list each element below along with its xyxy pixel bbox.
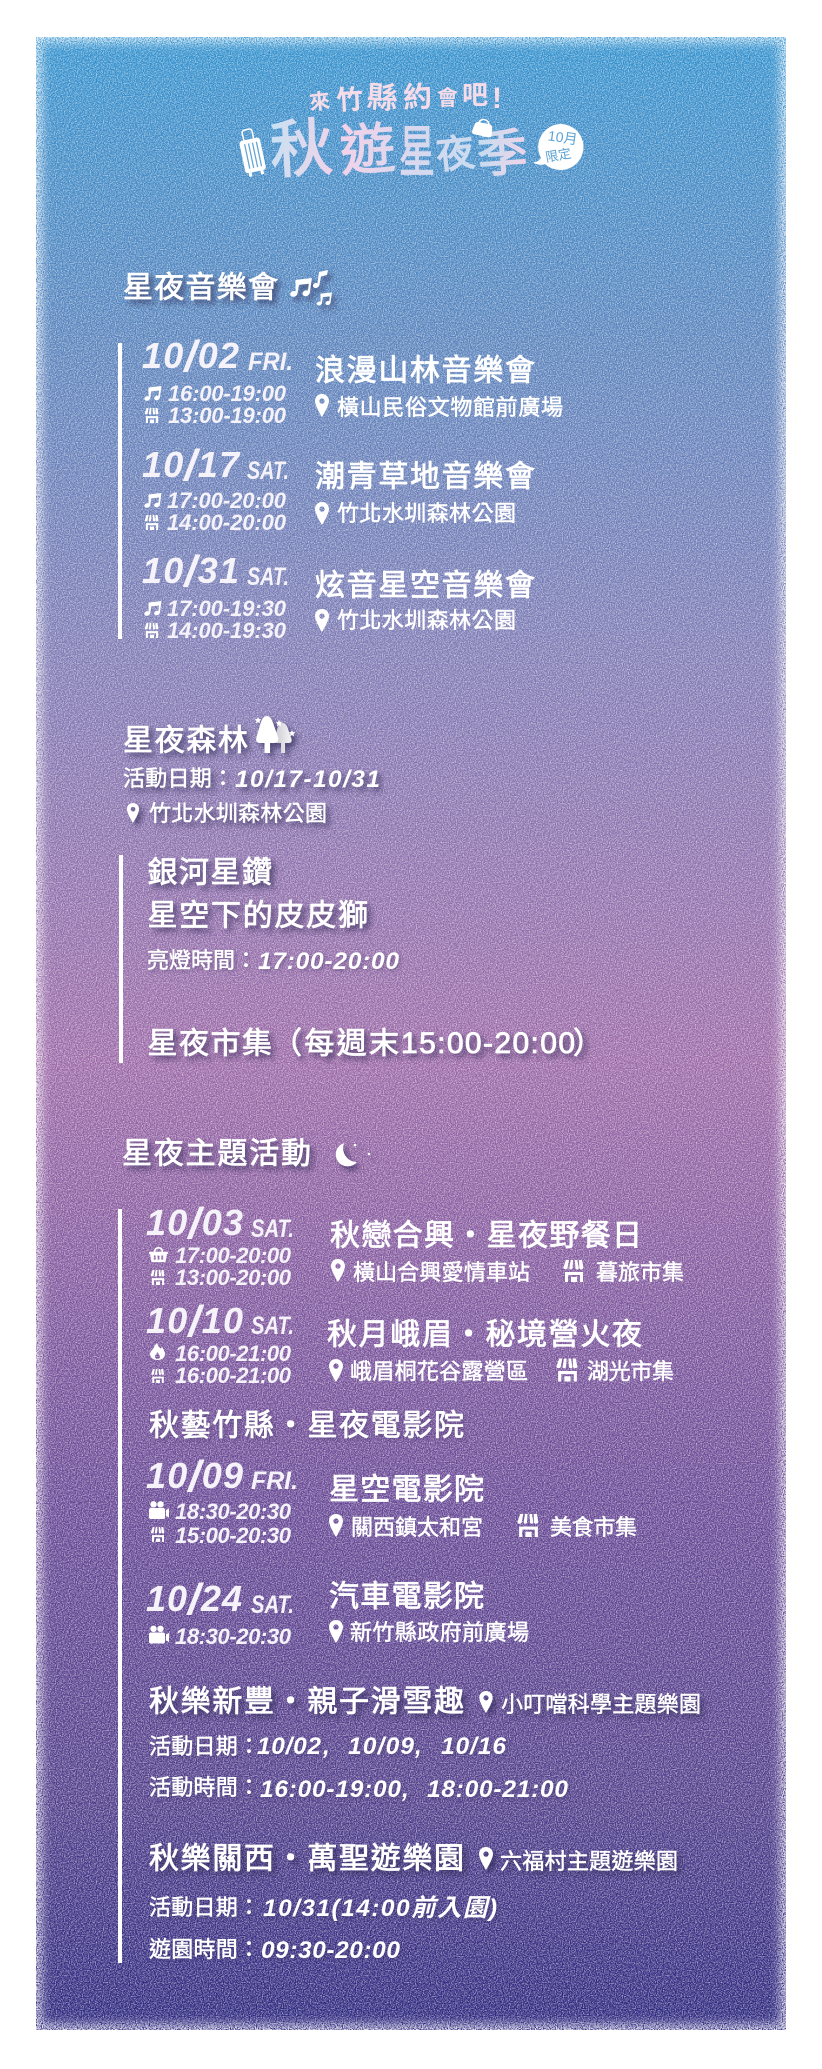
heading and location: 秋樂關西: 六福村主題遊樂園 xyxy=(500,1849,678,1874)
event: 10/03 秋戀合興: 13:00-20:00 xyxy=(175,1265,292,1290)
event: 10/31 炫音星空音樂會: 31 xyxy=(198,550,239,591)
event: 10/02 浪漫山林音樂會: / xyxy=(182,332,201,381)
logo main title: 遊 xyxy=(338,117,397,183)
event: 10/24 汽車電影院: / xyxy=(186,1575,205,1624)
event: 10/24 汽車電影院: 汽車電影院 xyxy=(329,1580,484,1614)
date: 活動日期: 活動日期： xyxy=(123,766,234,791)
dates and times: 秋樂關西: 10/31(14:00前入園) xyxy=(263,1895,497,1922)
event: 10/03 秋戀合興: / xyxy=(186,1199,205,1248)
event: 10/09 星空電影院: FRI. xyxy=(251,1467,298,1495)
logo main title: 秋 xyxy=(268,113,335,187)
event: 10/09 星空電影院: 15:00-20:30 xyxy=(175,1523,292,1548)
event: 10/17 潮青草地音樂會: 17:00-20:00 xyxy=(167,488,287,513)
event: 10/10 秋月峨眉: 10 xyxy=(146,1300,187,1341)
event: 10/10 秋月峨眉: 10 xyxy=(202,1300,243,1341)
dates and times: 秋樂關西: 09:30-20:00 xyxy=(261,1937,400,1964)
event: 10/09 星空電影院 xyxy=(146,1452,637,1548)
event: 10/10 秋月峨眉: 峨眉桐花谷露營區 xyxy=(350,1359,528,1384)
section: 星夜音樂會 xyxy=(118,270,563,643)
dates and times: 秋樂新豐: 10/16 xyxy=(441,1733,506,1760)
night market xyxy=(148,1027,603,1060)
dates and times: 秋樂新豐: 活動時間： xyxy=(149,1775,260,1800)
event: 10/02 浪漫山林音樂會: 02 xyxy=(198,335,239,376)
event: 10/02 浪漫山林音樂會: FRI. xyxy=(248,348,293,376)
dates and times: 秋樂新豐: 10/02 xyxy=(257,1733,321,1760)
speech bubble: 10月限定 xyxy=(533,124,583,170)
event: 10/02 浪漫山林音樂會 xyxy=(142,332,563,428)
event: 10/31 炫音星空音樂會: / xyxy=(182,547,201,596)
event: 10/17 潮青草地音樂會: 17 xyxy=(198,444,241,485)
event: 10/10 秋月峨眉: SAT. xyxy=(251,1312,294,1340)
event: 10/24 汽車電影院: 10 xyxy=(146,1578,187,1619)
logo tagline: 縣 xyxy=(366,81,399,116)
event: 10/10 秋月峨眉 xyxy=(146,1297,674,1388)
event: 10/10 秋月峨眉: / xyxy=(186,1297,205,1346)
night market: （每週末 xyxy=(272,1028,399,1060)
event: 10/17 潮青草地音樂會 xyxy=(142,441,535,535)
event: 10/10 秋月峨眉: 秋月峨眉・秘境營火夜 xyxy=(327,1318,642,1352)
dates and times: 秋樂新豐: , xyxy=(414,1733,422,1760)
divider bar xyxy=(118,1209,122,1963)
logo main title: 季 xyxy=(475,124,529,184)
event: 10/17 潮青草地音樂會: / xyxy=(182,441,201,490)
logo tagline: 會 xyxy=(437,86,458,110)
lighting time xyxy=(147,948,399,975)
event: 10/24 汽車電影院: 18:30-20:30 xyxy=(175,1624,292,1649)
heading and location: 秋樂關西: 秋樂關西・萬聖遊樂園 xyxy=(149,1842,464,1876)
night market: ） xyxy=(573,1028,603,1060)
title logo xyxy=(237,80,583,187)
heading: 星夜音樂會 xyxy=(123,270,332,306)
lighting time: 17:00-20:00 xyxy=(258,948,399,975)
divider bar xyxy=(118,343,122,639)
event: 10/31 炫音星空音樂會: 14:00-19:30 xyxy=(167,618,287,643)
event: 10/24 汽車電影院 xyxy=(146,1575,529,1649)
dates and times: 秋樂關西 xyxy=(149,1895,497,1964)
event: 10/17 潮青草地音樂會: 潮青草地音樂會 xyxy=(315,460,535,494)
dates and times: 秋樂關西: 活動日期： xyxy=(149,1895,260,1920)
dates and times: 秋樂新豐: 16:00-19:00 xyxy=(260,1776,401,1803)
event: 10/31 炫音星空音樂會: 炫音星空音樂會 xyxy=(315,570,535,602)
event: 10/31 炫音星空音樂會: 17:00-19:30 xyxy=(167,596,287,621)
icon: moon xyxy=(336,1143,370,1166)
dates and times: 秋樂新豐: , xyxy=(401,1776,409,1803)
event: 10/17 潮青草地音樂會: 竹北水圳森林公園 xyxy=(337,501,516,526)
icon: suitcase xyxy=(237,127,267,178)
event: 10/09 星空電影院: 關西鎮太和宮 xyxy=(351,1515,483,1540)
heading and location: 秋樂新豐: 小叮噹科學主題樂園 xyxy=(501,1692,701,1717)
icon: music notes xyxy=(290,270,332,306)
event: 10/31 炫音星空音樂會: 竹北水圳森林公園 xyxy=(337,608,516,633)
event: 10/24 汽車電影院: 24 xyxy=(200,1578,242,1619)
event: 10/09 星空電影院: / xyxy=(186,1452,205,1501)
night market: 星夜市集 xyxy=(148,1028,272,1060)
icon: bag xyxy=(472,118,495,138)
night market: 15:00-20:00 xyxy=(401,1027,575,1060)
event: 秋樂關西 xyxy=(149,1842,678,1964)
event: 10/03 秋戀合興: 17:00-20:00 xyxy=(175,1243,292,1268)
logo tagline xyxy=(308,80,502,116)
event: 秋樂新豐 xyxy=(149,1686,701,1803)
event: 10/02 浪漫山林音樂會: 10 xyxy=(142,335,183,376)
event: 10/02 浪漫山林音樂會: 13:00-19:00 xyxy=(168,403,287,428)
heading and location: 秋樂新豐 xyxy=(149,1686,701,1718)
lighting time: 亮燈時間： xyxy=(147,948,257,973)
forest attractions xyxy=(148,856,368,932)
logo main title: 星 xyxy=(399,121,435,183)
forest attractions: 星空下的皮皮獅 xyxy=(148,900,368,932)
event: 10/03 秋戀合興: 暮旅市集 xyxy=(596,1260,684,1285)
dates and times: 秋樂新豐: 活動日期： xyxy=(149,1734,260,1759)
logo tagline: 吧 xyxy=(462,80,488,110)
event: 10/09 星空電影院: 18:30-20:30 xyxy=(175,1499,292,1524)
event: 10/31 炫音星空音樂會: 10 xyxy=(142,550,183,591)
section: 星夜主題活動 xyxy=(118,1138,701,1964)
event: 10/24 汽車電影院: SAT. xyxy=(251,1591,294,1619)
dates and times: 秋樂新豐: , xyxy=(322,1733,330,1760)
divider bar xyxy=(119,855,123,1063)
icon: trees and stars xyxy=(255,716,295,753)
dates and times: 秋樂新豐 xyxy=(149,1733,568,1803)
heading and location: 秋樂關西 xyxy=(149,1842,678,1876)
event: 10/02 浪漫山林音樂會: 浪漫山林音樂會 xyxy=(315,354,535,388)
event: 10/03 秋戀合興: 03 xyxy=(202,1202,243,1243)
logo main title xyxy=(268,113,529,187)
dates and times: 秋樂新豐: 18:00-21:00 xyxy=(427,1776,568,1803)
speech bubble: 10月限定: 10月 xyxy=(547,127,579,147)
event: 10/09 星空電影院: 星空電影院 xyxy=(329,1474,484,1506)
event: 10/03 秋戀合興: SAT. xyxy=(251,1215,294,1243)
event: 10/09 星空電影院: 09 xyxy=(202,1455,243,1496)
event: 10/10 秋月峨眉: 16:00-21:00 xyxy=(175,1341,292,1366)
event: 10/17 潮青草地音樂會: SAT. xyxy=(247,457,289,485)
heading and location: 秋樂新豐: 秋樂新豐・親子滑雪趣 xyxy=(149,1686,464,1718)
speech bubble: 10月限定: 限定 xyxy=(544,146,572,165)
event: 10/24 汽車電影院: 新竹縣政府前廣場 xyxy=(350,1620,529,1645)
date: 活動日期 xyxy=(123,766,380,793)
event: 10/09 星空電影院: 10 xyxy=(146,1455,187,1496)
event: 10/10 秋月峨眉: 湖光市集 xyxy=(587,1359,674,1384)
event: 10/31 炫音星空音樂會 xyxy=(142,547,535,643)
event: 10/17 潮青草地音樂會: 10 xyxy=(142,444,183,485)
logo tagline: ! xyxy=(492,82,502,115)
heading: 秋藝竹縣: 秋藝竹縣・星夜電影院 xyxy=(149,1410,464,1442)
dates and times: 秋樂新豐: 10/09 xyxy=(348,1733,414,1760)
logo tagline: 竹 xyxy=(335,84,364,116)
event: 10/03 秋戀合興: 橫山合興愛情車站 xyxy=(353,1260,530,1285)
event: 10/03 秋戀合興 xyxy=(146,1199,684,1290)
date: 活動日期: 10/17-10/31 xyxy=(235,766,380,793)
event: 10/31 炫音星空音樂會: SAT. xyxy=(247,563,289,591)
logo main title: 夜 xyxy=(434,132,477,178)
event: 10/09 星空電影院: 美食市集 xyxy=(550,1515,637,1540)
event: 10/02 浪漫山林音樂會: 橫山民俗文物館前廣場 xyxy=(337,395,563,420)
location: 竹北水圳森林公園: 竹北水圳森林公園 xyxy=(149,801,327,826)
event: 10/10 秋月峨眉: 16:00-21:00 xyxy=(175,1363,292,1388)
logo tagline: 來 xyxy=(308,90,331,115)
event: 10/03 秋戀合興: 秋戀合興・星夜野餐日 xyxy=(330,1220,642,1252)
dates and times: 秋樂關西: 遊園時間： xyxy=(149,1937,260,1962)
heading: 星夜森林: 星夜森林 xyxy=(123,724,248,758)
event: 10/02 浪漫山林音樂會: 16:00-19:00 xyxy=(168,381,287,406)
section: 星夜森林 xyxy=(123,716,380,826)
forest attractions: 銀河星鑽 xyxy=(148,856,272,890)
logo tagline: 約 xyxy=(402,80,433,115)
event: 10/17 潮青草地音樂會: 14:00-20:00 xyxy=(167,510,287,535)
heading: 星夜主題活動: 星夜主題活動 xyxy=(122,1138,311,1170)
heading: 星夜音樂會: 星夜音樂會 xyxy=(123,272,278,304)
event: 10/03 秋戀合興: 10 xyxy=(146,1202,187,1243)
